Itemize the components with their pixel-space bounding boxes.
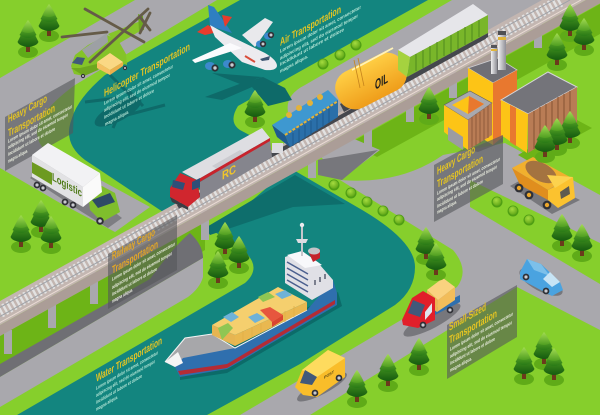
yellow van [294, 350, 350, 406]
container ship [165, 223, 342, 380]
panel: heavy cargo right backing [434, 127, 503, 222]
panel: heavy cargo left: incididunt ut labore et dolore [8, 126, 55, 158]
far wing [242, 18, 273, 47]
panel: heavy cargo left: magna aliqua. [8, 148, 28, 165]
van label: POST [324, 369, 334, 380]
airplane shadow [205, 73, 292, 106]
factory [444, 31, 592, 162]
engines [205, 32, 274, 72]
bridge shadow on water [205, 175, 345, 235]
text: helicopter transportation [104, 39, 190, 128]
hull [165, 280, 337, 377]
panel: railway cargo [108, 215, 177, 309]
cargo box [97, 53, 123, 75]
wheels [178, 37, 485, 207]
dump truck [510, 156, 580, 214]
panel: heavy cargo left: Transportation [8, 101, 55, 140]
helicopter [62, 9, 150, 78]
oil tank wagon [329, 46, 413, 116]
train [170, 4, 488, 210]
text: water transportation: adipiscing elit, sed do eiusmod tempor [96, 359, 156, 399]
helicopter shadow [85, 75, 165, 132]
tail [108, 22, 144, 44]
water: lower river [17, 168, 415, 415]
panel: small-sized transportation [447, 285, 517, 379]
panel: small-sized transportation: Small-Sized [449, 300, 486, 334]
small bushes [318, 40, 534, 226]
panel: railway cargo: Railway Cargo [112, 225, 155, 263]
bridge: piers [4, 24, 542, 354]
panel: railway cargo: adipiscing elit, sed do eiusmod tempor [112, 251, 173, 291]
oil label: OIL [375, 70, 388, 94]
text: air transportation: incididunt ut labore et dolore [280, 27, 344, 68]
text: helicopter transportation: Helicopter Transportation [104, 39, 190, 100]
blue van [516, 259, 566, 301]
body [71, 35, 127, 76]
text: helicopter transportation: adipiscing elit, sed do eiusmod tempor [104, 73, 170, 114]
factory shadow [518, 120, 592, 162]
panel: small-sized transportation: adipiscing elit, sed do eiusmod tempor [450, 320, 512, 360]
text: heavy cargo right: Transportation [437, 152, 483, 191]
panel: heavy cargo left: adipiscing elit, sed do eiusmod tempor [8, 112, 68, 151]
green wagon [398, 4, 488, 81]
chimneys [491, 31, 506, 74]
text: heavy cargo right: Lorem ipsum dolor sit amet, consectetur [437, 157, 500, 197]
panel: small-sized transportation: magna aliqua. [450, 356, 472, 374]
text: air transportation: adipiscing elit, sed do eiusmod tempor [280, 13, 358, 62]
logistic truck [30, 143, 122, 228]
text: helicopter transportation: incididunt ut labore et dolore [104, 88, 154, 121]
text: water transportation [96, 334, 162, 413]
panel: small-sized transportation: Transportation [449, 306, 497, 347]
water: upper river [69, 0, 428, 212]
locomotive [170, 128, 272, 210]
text: heavy cargo right: adipiscing elit, sed do eiusmod tempor [437, 164, 497, 203]
locomotive logo: RC [222, 161, 236, 183]
text: helicopter transportation: magna aliqua. [105, 109, 129, 128]
tower [468, 58, 517, 145]
airplane [192, 5, 277, 72]
superstructure [285, 223, 333, 300]
building shadow [468, 135, 503, 152]
blue wagon [272, 90, 338, 153]
text: heavy cargo right: Heavy Cargo [437, 142, 475, 178]
rotor blades [62, 9, 150, 62]
panel: small-sized transportation: Lorem ipsum dolor sit amet, consectetur [450, 311, 514, 353]
containers [212, 287, 307, 346]
panel: heavy cargo left: Lorem ipsum dolor sit amet, consectetur [8, 104, 72, 145]
fuselage [210, 25, 277, 70]
text: heavy cargo right: magna aliqua. [437, 199, 457, 216]
panel: small-sized transportation: incididunt ut labore et dolore [450, 337, 495, 367]
text: heavy cargo right: incididunt ut labore et dolore [437, 179, 483, 210]
text: helicopter transportation: Lorem ipsum dolor sit amet, consectetur [104, 64, 173, 107]
panel: railway cargo: Lorem ipsum dolor sit amet, consectetur [112, 241, 176, 283]
panel: heavy cargo left: Heavy Cargo [8, 91, 47, 126]
near wing [192, 43, 242, 63]
panel: heavy cargo left [5, 78, 75, 171]
right building [501, 72, 577, 153]
ship shadow [180, 292, 342, 380]
text: water transportation: Lorem ipsum dolor sit amet, consectetur [96, 350, 159, 392]
red truck [400, 278, 464, 342]
text: air transportation [280, 2, 361, 75]
text: heavy cargo right [437, 142, 500, 216]
panel: railway cargo: magna aliqua. [112, 287, 133, 305]
logistic label: Logistic [52, 170, 82, 200]
panel: railway cargo: Transportation [112, 237, 158, 277]
text: water transportation: magna aliqua. [96, 394, 118, 413]
text: water transportation: Water Transportation [96, 334, 162, 385]
text: water transportation: incididunt ut labore et dolore [96, 374, 142, 406]
left low building [444, 91, 492, 150]
panel: railway cargo: incididunt ut labore et dolore [112, 267, 157, 298]
tail fin [208, 5, 232, 33]
text: air transportation: magna aliqua. [280, 54, 308, 75]
